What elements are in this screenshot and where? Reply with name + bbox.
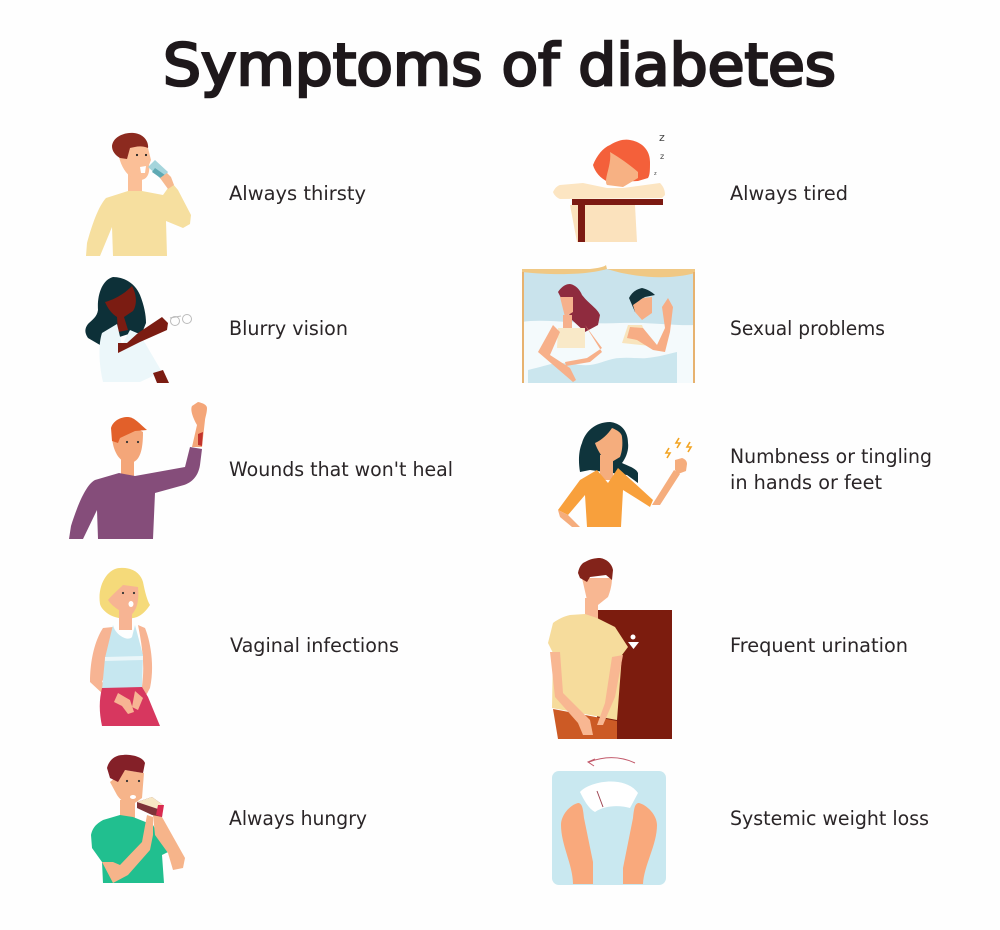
label: Wounds that won't heal: [229, 458, 453, 481]
icon: man drinking water: [86, 133, 191, 256]
icon: bathroom scale with feet: [552, 758, 666, 885]
icon: person sleeping at table: z: [659, 131, 665, 144]
panel: frequent urination: [548, 558, 908, 739]
panel: always tired: [553, 131, 848, 242]
panel: always hungry: [91, 755, 367, 883]
panel: numbness: [558, 422, 932, 527]
label: Always tired: [730, 182, 848, 205]
label: [730, 445, 932, 494]
label: Systemic weight loss: [730, 807, 929, 830]
panel: vaginal infections: [90, 568, 399, 726]
icon: woman with tingling hand: [558, 422, 691, 527]
icon: woman in blue top: [90, 568, 160, 726]
label: Sexual problems: [730, 317, 885, 340]
title: Symptoms of diabetes: [163, 31, 836, 99]
panel: always thirsty: [86, 133, 366, 256]
icon: couple in bed: [522, 265, 695, 383]
panel: systemic weight loss: [552, 758, 929, 885]
icon: woman holding glasses: [85, 277, 192, 383]
panel: wounds: [69, 402, 453, 539]
icon: man eating cake: [91, 755, 185, 883]
label: in hands or feet: [730, 471, 882, 494]
icon: person sleeping at table: z: [660, 152, 664, 161]
label: Vaginal infections: [230, 634, 399, 657]
label: Always hungry: [229, 807, 367, 830]
icon: person sleeping at table: z: [654, 171, 657, 177]
panel: blurry vision: [85, 277, 348, 383]
icon: man in front of toilet door: [548, 558, 672, 739]
label: Always thirsty: [229, 182, 366, 205]
label: Frequent urination: [730, 634, 908, 657]
icon: man raising wounded arm: [69, 402, 207, 539]
label: Numbness or tingling: [730, 445, 932, 468]
label: Blurry vision: [229, 317, 348, 340]
icon: person sleeping at table: [553, 131, 665, 242]
panel: sexual problems: [522, 265, 885, 383]
